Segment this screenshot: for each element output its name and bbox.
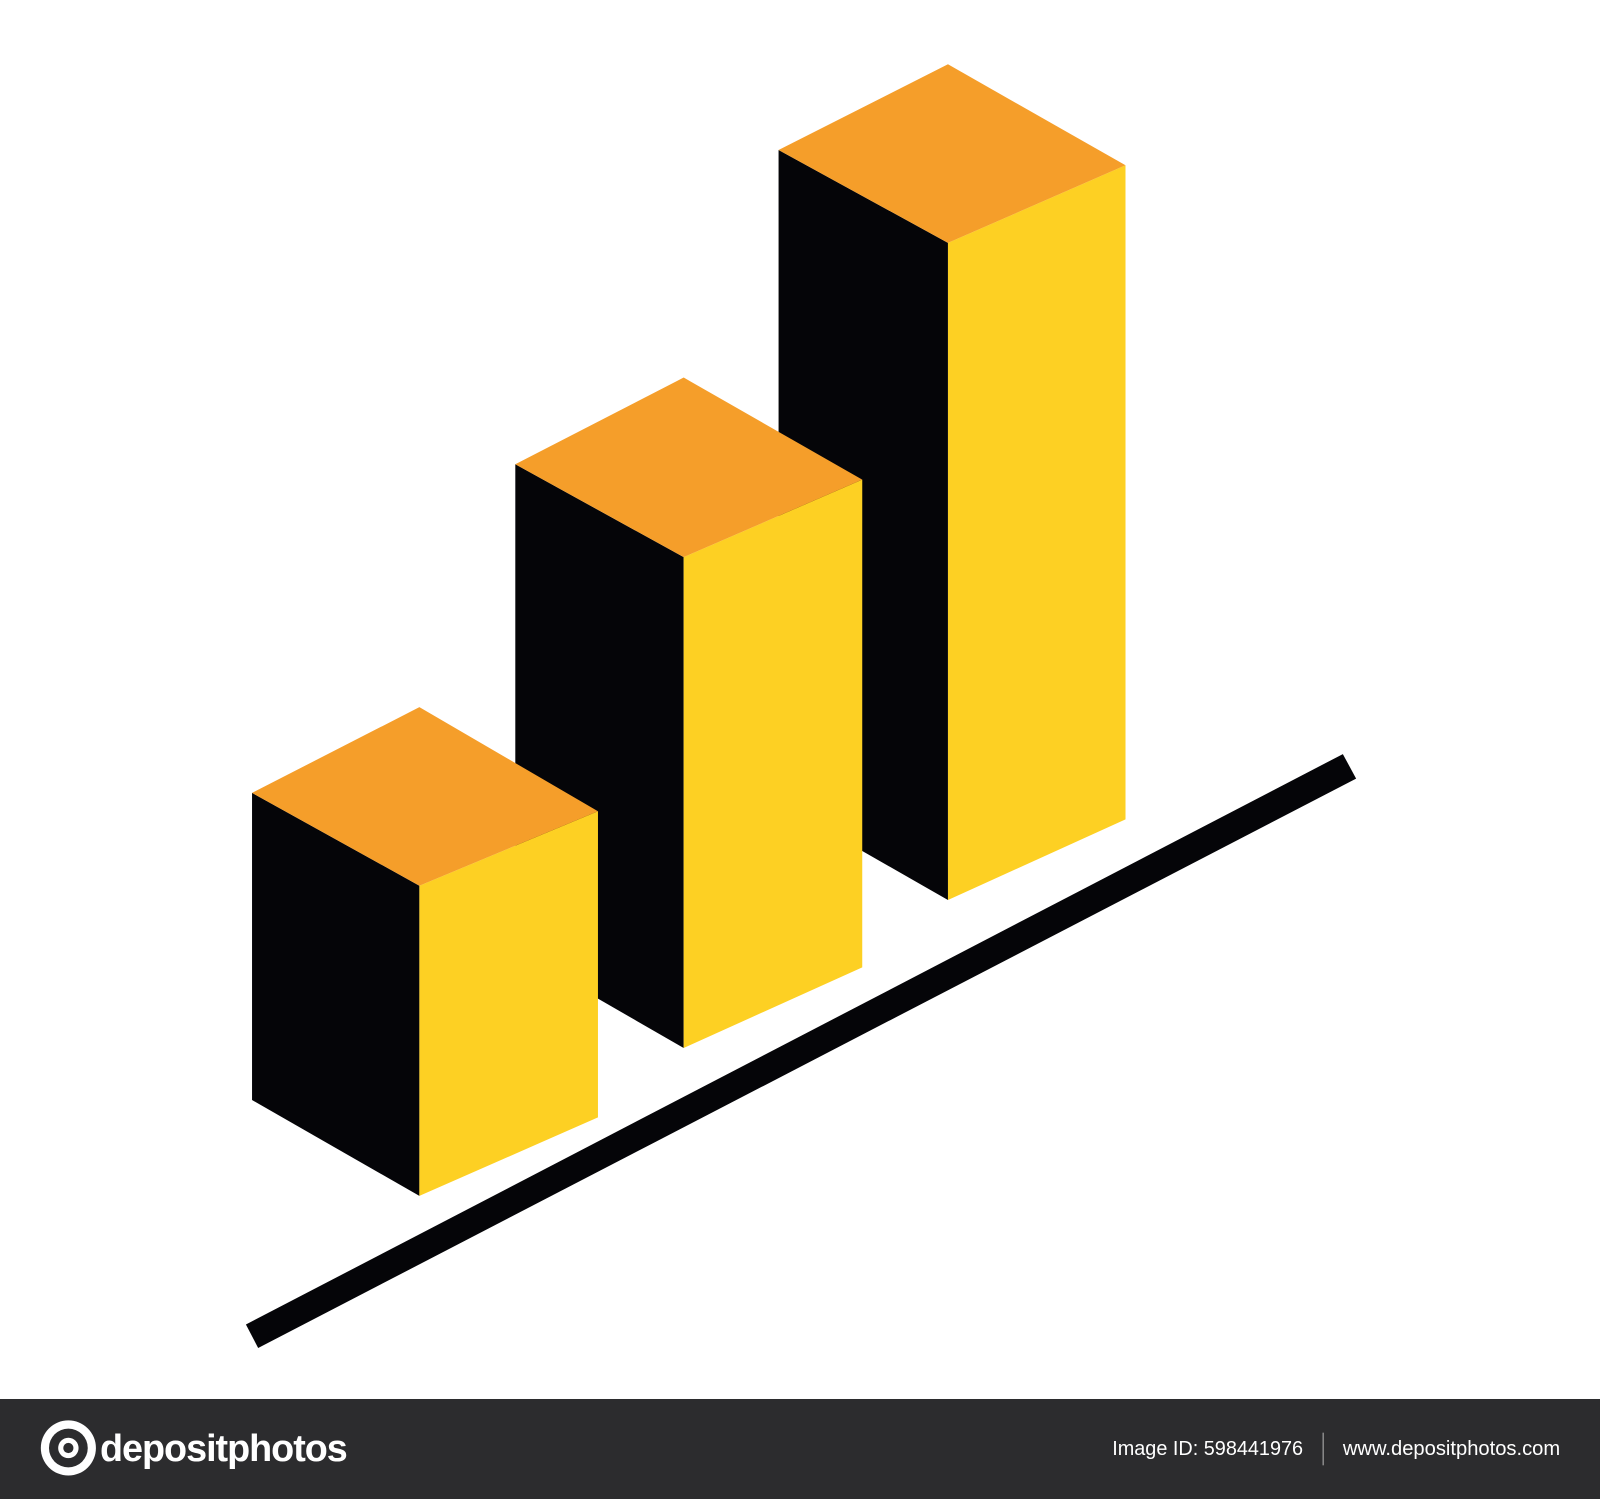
icon: depositphotos logo [41,1420,96,1476]
brand name: depositphotos [100,1427,347,1469]
image id: Image ID: 598441976 [1112,1438,1303,1460]
baseline axis line [246,754,1356,1348]
bar chart: isometric bars [252,64,1126,1196]
bar 3 (tallest) [779,64,1126,900]
footer bar [0,1399,1600,1499]
bar 1 (shortest) [252,707,598,1196]
website url: www.depositphotos.com [1342,1438,1560,1460]
bar 2 (middle) [515,378,862,1048]
